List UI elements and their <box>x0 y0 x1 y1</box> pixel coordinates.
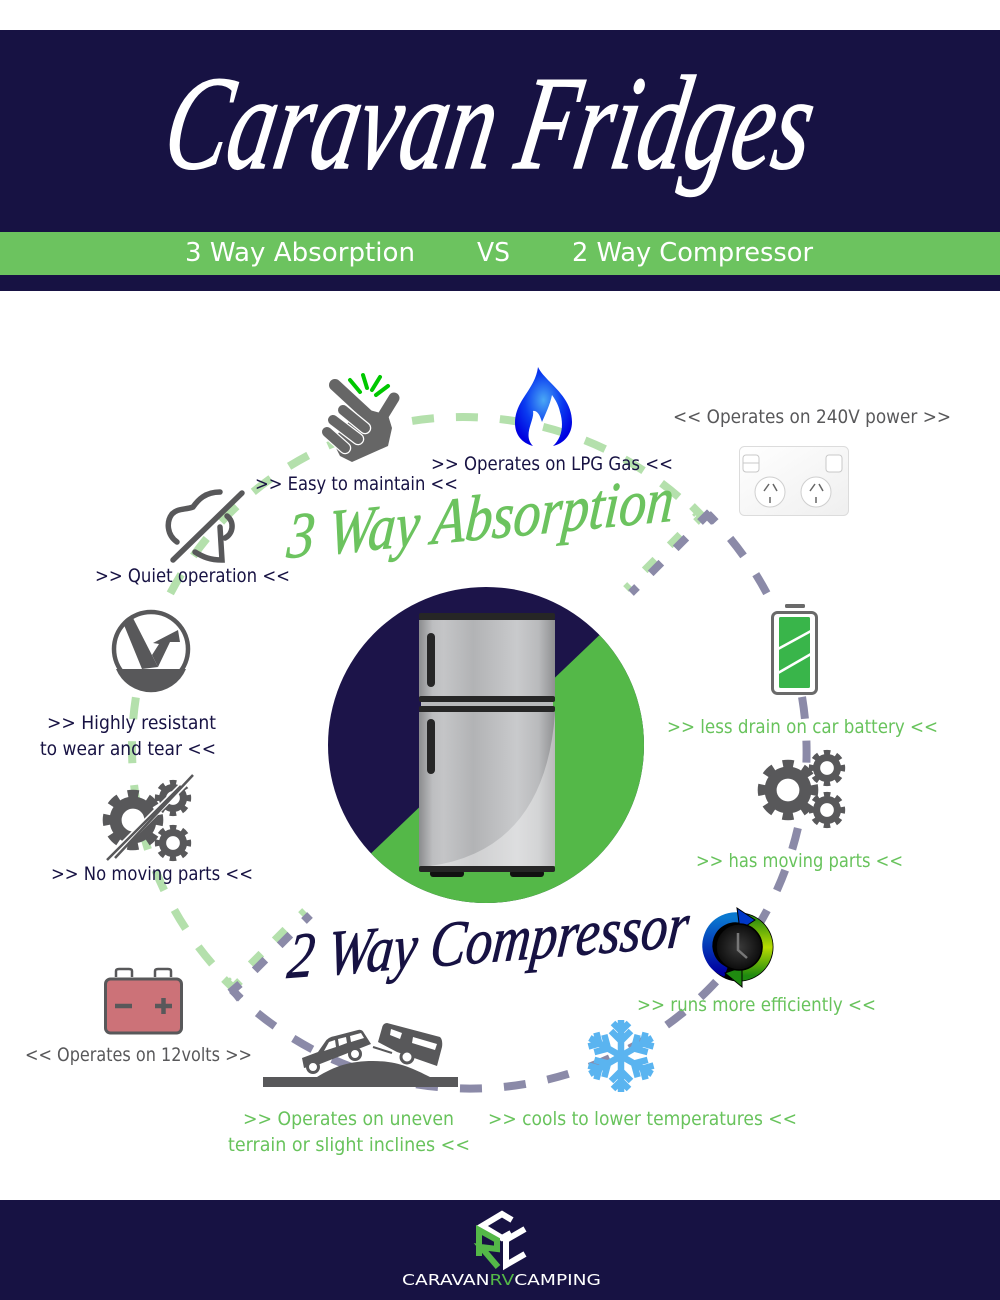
label: has moving parts: >> has moving parts << <box>696 850 903 872</box>
label: easy to maintain: >> Easy to maintain << <box>255 473 458 495</box>
icon: car battery <box>106 969 182 1033</box>
icon: efficiency clock <box>704 908 774 987</box>
label: uneven terrain <box>228 1108 470 1156</box>
icon: finger snap <box>327 375 394 462</box>
icon: wear resistant <box>114 612 188 692</box>
subtitle: 3 way absorption: 3 Way Absorption <box>185 238 415 268</box>
label: quiet operation: >> Quiet operation << <box>95 565 290 587</box>
central circle <box>328 587 644 903</box>
footer band <box>0 1200 1000 1300</box>
label: highly resistant <box>40 712 216 760</box>
label: uneven terrain: >> Operates on uneven <box>243 1108 454 1130</box>
subtitle: 2 way compressor: 2 Way Compressor <box>572 238 813 268</box>
icon: car and caravan on hill <box>263 1023 458 1087</box>
icon: gears <box>762 752 843 826</box>
icon: crossed gears <box>107 775 193 861</box>
footer logo <box>402 1214 601 1289</box>
label: cools: >> cools to lower temperatures << <box>488 1108 797 1130</box>
label: less drain: >> less drain on car battery << <box>667 716 938 738</box>
label: no moving parts: >> No moving parts << <box>51 863 253 885</box>
green dashed ring <box>132 417 702 988</box>
label: 240v: << Operates on 240V power >> <box>673 406 951 428</box>
icon: power socket <box>740 446 848 516</box>
header band <box>0 30 1000 291</box>
icon: snowflake <box>585 1020 657 1092</box>
heading: 2 way compressor script: 2 Way Compressor <box>285 889 693 992</box>
icon: muted bell <box>168 492 242 560</box>
label: highly resistant: >> Highly resistant <box>47 712 216 734</box>
label: uneven terrain: terrain or slight inclines << <box>228 1134 470 1156</box>
label: 12 volts: << Operates on 12volts >> <box>25 1044 252 1066</box>
grey dashed ring <box>232 514 807 1089</box>
subtitle: vs: VS <box>477 238 510 268</box>
label: runs more efficiently: >> runs more efficiently << <box>637 994 876 1016</box>
footer brand name: CARAVAN RV CAMPING <box>402 1271 601 1289</box>
heading: 3 way absorption script: 3 Way Absorption <box>284 464 677 572</box>
icon: gas flame <box>515 367 572 446</box>
icon: battery charge <box>772 604 816 694</box>
label: lpg gas: >> Operates on LPG Gas << <box>431 453 673 475</box>
green subtitle bar <box>0 232 1000 275</box>
fridge <box>419 613 555 877</box>
label: highly resistant: to wear and tear << <box>40 738 216 760</box>
